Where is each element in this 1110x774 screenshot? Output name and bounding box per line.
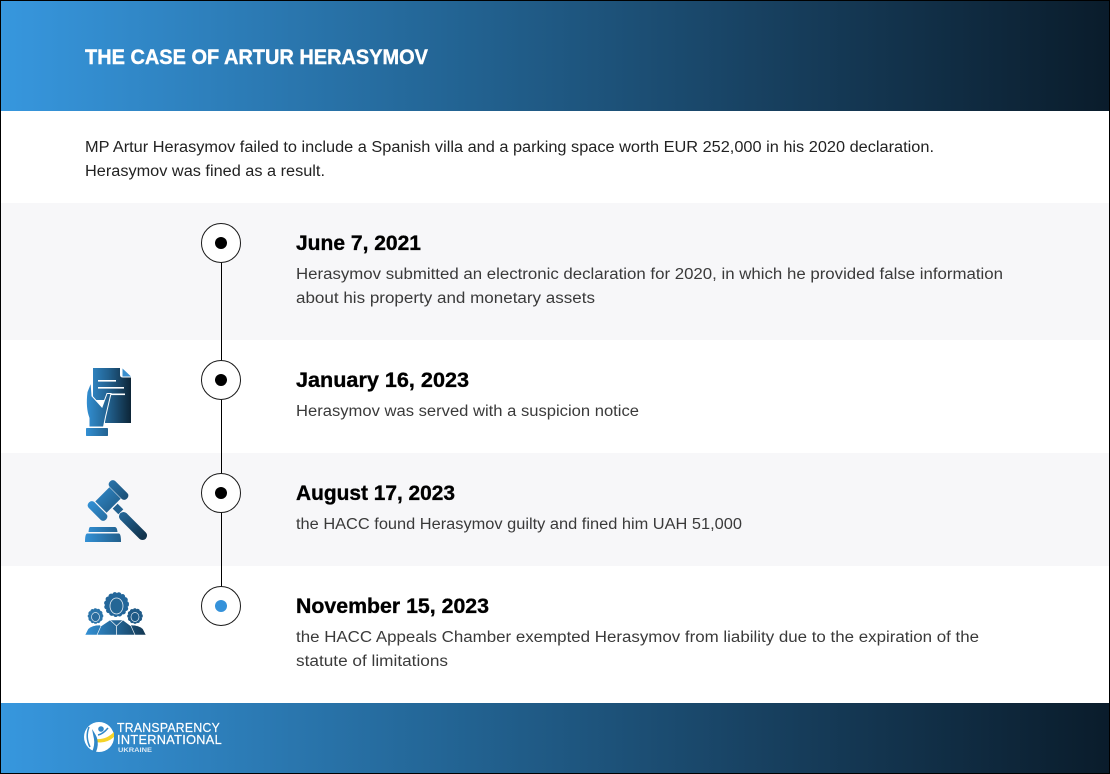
entry: November 15, 2023: November 15, 2023: [296, 595, 489, 618]
timeline: [202, 224, 240, 626]
row band: August 2023: [1, 453, 1109, 566]
intro text: MP Artur Herasymov failed to include a Spanish villa and a parking space worth EUR 252,000 in his 2020 declaration.: [85, 139, 934, 156]
logo: Transparency International Ukraine: TRANSPARENCY: [117, 721, 220, 735]
entry: June 7, 2021: about his property and monetary assets: [296, 290, 595, 307]
logo: Transparency International Ukraine: [84, 721, 222, 754]
entry: November 15, 2023: [296, 595, 979, 670]
logo: Transparency International Ukraine: UKRAINE: [118, 747, 153, 754]
marker: August 17, 2023: [202, 474, 240, 512]
entry: June 7, 2021: Herasymov submitted an electronic declaration for 2020, in which he provided false information: [296, 266, 1003, 283]
entry: June 7, 2021: [296, 232, 1003, 307]
header band: [1, 1, 1109, 111]
title: THE CASE OF ARTUR HERASYMOV: [85, 46, 428, 69]
entry: November 15, 2023: statute of limitations: [296, 653, 448, 670]
marker: November 15, 2023: [202, 586, 240, 626]
intro text: [85, 139, 934, 180]
entry: January 16, 2023: [296, 369, 639, 420]
logo: Transparency International Ukraine: INTERNATIONAL: [117, 733, 222, 747]
entry: November 15, 2023: the HACC Appeals Chamber exempted Herasymov from liability due to the expiration of the: [296, 629, 979, 646]
entry: June 7, 2021: June 7, 2021: [296, 232, 421, 255]
row band: June 2021: [1, 203, 1109, 340]
icon: group of judges: [85, 594, 146, 635]
intro text: Herasymov was fined as a result.: [85, 163, 325, 180]
entry: January 16, 2023: January 16, 2023: [296, 369, 469, 392]
marker: June 7, 2021: [202, 224, 240, 262]
footer band: [1, 703, 1109, 773]
icon: gavel: [85, 479, 149, 542]
entry: January 16, 2023: Herasymov was served with a suspicion notice: [296, 403, 639, 420]
entry: August 17, 2023: [296, 482, 742, 533]
entry: August 17, 2023: August 17, 2023: [296, 482, 455, 505]
entry: August 17, 2023: the HACC found Herasymov guilty and fined him UAH 51,000: [296, 516, 742, 533]
marker: January 16, 2023: [202, 360, 240, 400]
icon: hand holding document: [86, 368, 131, 436]
